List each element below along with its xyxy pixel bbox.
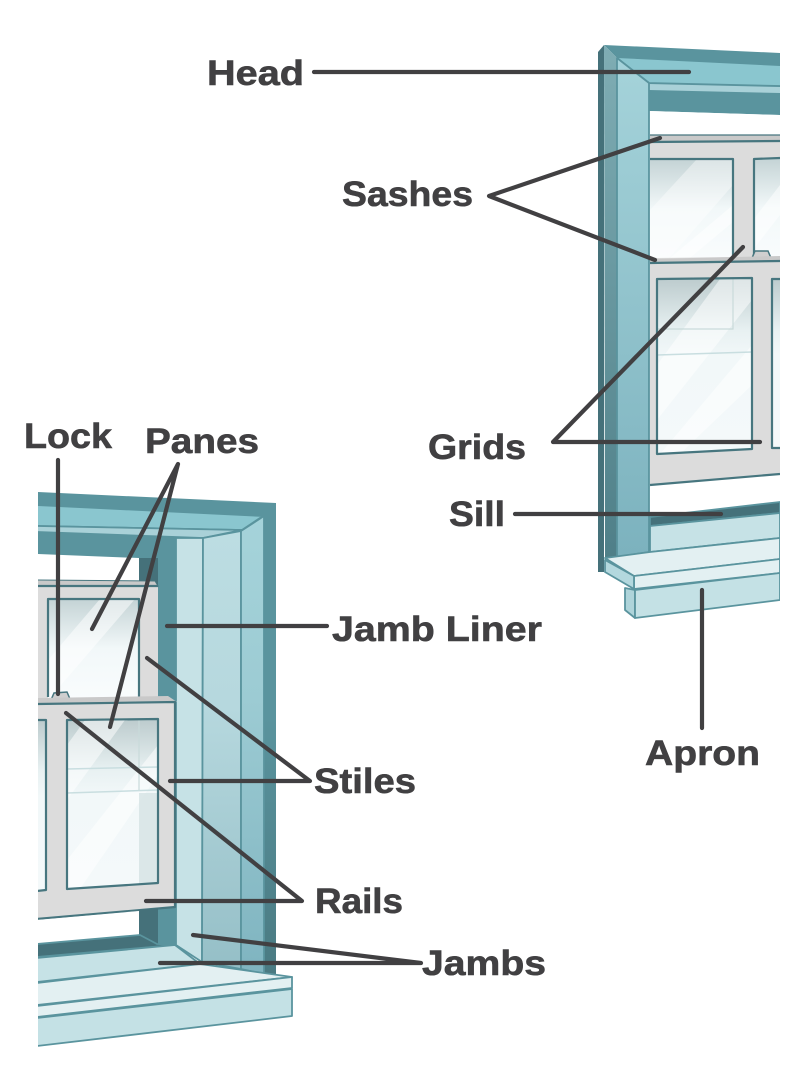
sill interior: [650, 513, 780, 552]
meeting rail: [38, 696, 177, 703]
meeting rail: [650, 256, 780, 262]
lower sash: [37, 702, 175, 919]
pane: lower right: [772, 279, 780, 448]
jamb left: [598, 45, 649, 572]
pane: upper: [48, 599, 139, 698]
channel lower: [139, 908, 158, 944]
callout: Jamb Liner: Jamb Liner: [332, 610, 542, 649]
callout: Rails: [66, 713, 403, 921]
sill front: [634, 559, 780, 589]
lock: [51, 691, 70, 698]
callout: Panes: Panes: [145, 422, 259, 461]
callout: Stiles: [147, 658, 416, 801]
jamb: outer face: [241, 516, 264, 974]
callout: Sashes: [342, 138, 660, 260]
apron: [37, 989, 292, 1046]
callout: Jambs: [160, 935, 546, 983]
head and right frame: [37, 492, 276, 975]
white opening: [650, 111, 779, 115]
callout: Apron: Apron: [645, 734, 760, 773]
jamb: inner face: [176, 538, 203, 962]
callout: Lock: Lock: [24, 417, 113, 456]
pane: far left: [37, 720, 46, 891]
apron: [625, 573, 780, 618]
sill top: [37, 964, 292, 1005]
upper sash: [650, 135, 780, 260]
callout: Stiles: Stiles: [314, 762, 416, 801]
callout: Grids: Grids: [428, 428, 526, 467]
sill channel: [650, 502, 780, 526]
channel dark: [139, 558, 158, 588]
sill interior: [37, 945, 200, 982]
lower sash: [650, 261, 780, 485]
callout: Rails: Rails: [315, 882, 403, 921]
callout: Panes: [92, 422, 259, 727]
white opening below sash: [38, 911, 139, 920]
sill side: [605, 560, 634, 589]
jamb: liner middle: [202, 531, 241, 969]
pane: upper right: [753, 158, 780, 257]
illustration: window right: [598, 45, 780, 618]
callout: Sill: Sill: [449, 495, 505, 534]
pane: upper left: [650, 158, 734, 258]
illustration: window left: [37, 492, 292, 1046]
callout: Jambs: Jambs: [422, 944, 546, 983]
sill front: [37, 977, 292, 1017]
callout: Grids: [428, 247, 760, 467]
head frame: [604, 45, 780, 115]
callout: Sashes: Sashes: [342, 175, 473, 214]
callout: Head: Head: [207, 54, 304, 93]
pane: lower left: [657, 278, 752, 454]
jamb: outer dark: [265, 790, 276, 974]
sill channel: [37, 935, 175, 957]
sill top: [605, 538, 780, 576]
upper sash: [37, 580, 158, 698]
pane: lower: [67, 719, 158, 889]
lock: [752, 251, 771, 258]
